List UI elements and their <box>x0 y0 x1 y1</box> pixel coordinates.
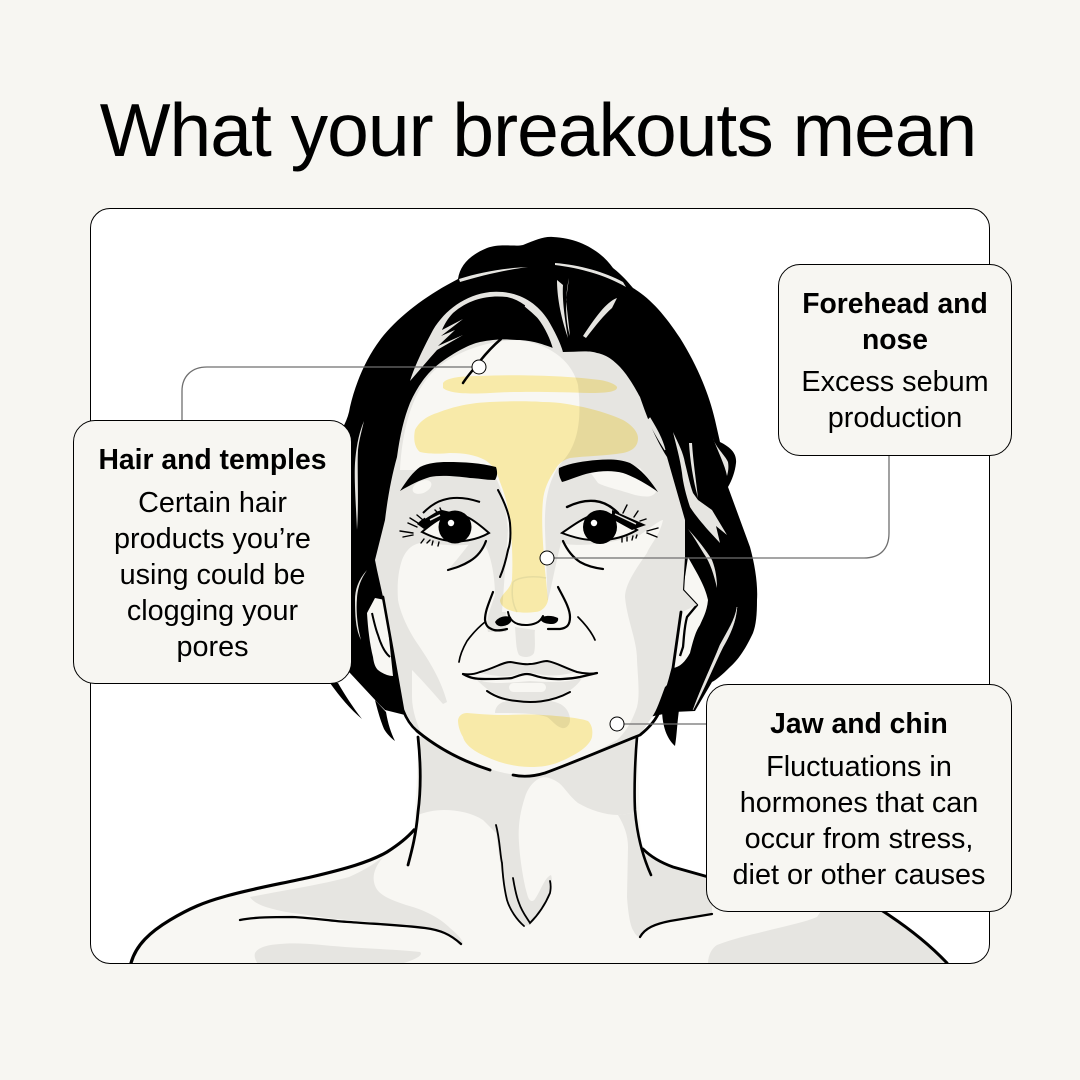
callout: forehead and nose: Excess sebum <box>801 366 989 398</box>
callout: jaw and chin: occur from stress, <box>745 823 973 855</box>
nose, lips and cheek lines <box>383 339 681 776</box>
callout: hair and temples: using could be <box>120 559 305 591</box>
callout: forehead and nose: nose <box>862 323 928 355</box>
hair highlights <box>355 263 737 710</box>
breakout zones: forehead, nose and chin in yellow <box>414 375 638 767</box>
callout: hair and temples: products you’re <box>114 523 311 555</box>
face light areas <box>400 340 579 612</box>
connector lines <box>182 367 889 724</box>
face <box>375 339 697 776</box>
marker: forehead and nose <box>540 551 554 565</box>
left eye <box>400 498 489 570</box>
callout: forehead and nose: production <box>828 402 962 434</box>
hair <box>330 237 757 746</box>
panel: illustration background <box>90 208 990 964</box>
callout: hair and temples: Certain hair <box>138 487 287 519</box>
body: shoulders and chest <box>131 737 947 964</box>
neck and shoulder outlines <box>131 737 947 963</box>
ears <box>367 557 708 676</box>
nostrils <box>495 616 558 626</box>
marker: jaw and chin <box>610 717 624 731</box>
callout: forehead and nose: Forehead and <box>802 287 988 319</box>
callout: jaw and chin: Jaw and chin <box>770 707 948 739</box>
marker: hair and temples <box>472 360 486 374</box>
title: What your breakouts mean <box>100 88 976 172</box>
nose tip contour <box>512 577 546 612</box>
callout: forehead and nose <box>778 264 1012 456</box>
callout: jaw and chin <box>706 684 1012 912</box>
right eye <box>562 501 658 569</box>
callout: jaw and chin: hormones that can <box>740 787 978 819</box>
brows <box>400 459 658 492</box>
callout: jaw and chin: diet or other causes <box>733 859 985 891</box>
illustration: face with breakout zones <box>129 236 949 963</box>
callout: hair and temples: pores <box>176 631 249 663</box>
callout: hair and temples <box>73 420 352 684</box>
callout: hair and temples: clogging your <box>127 595 298 627</box>
callout: jaw and chin: Fluctuations in <box>766 751 952 783</box>
callout: hair and temples: Hair and temples <box>98 443 327 475</box>
